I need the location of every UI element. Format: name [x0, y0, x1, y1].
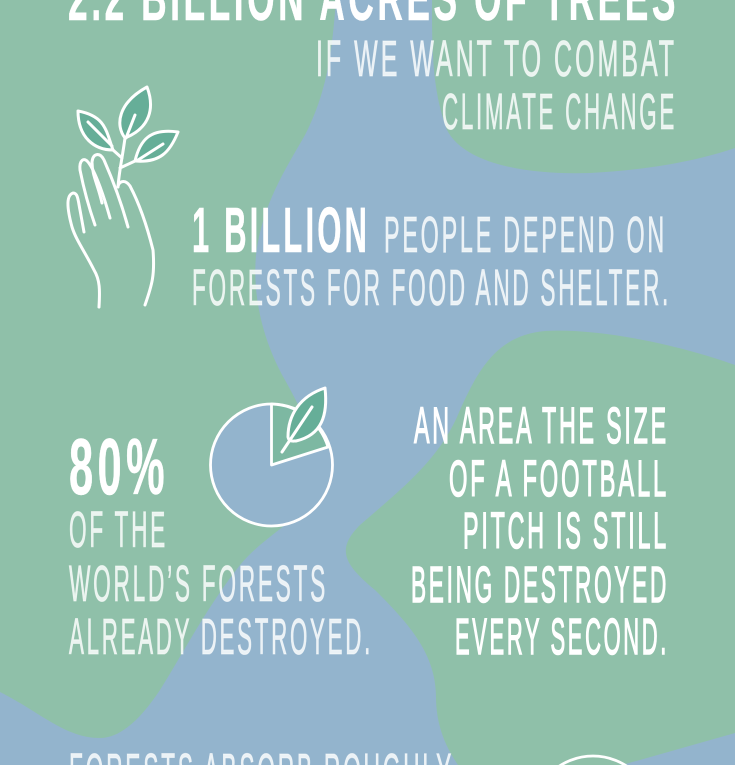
text block: football pitch	[411, 397, 669, 665]
background blob: lower right green	[346, 331, 735, 765]
background blob: left green	[0, 0, 336, 738]
stat: 1 billion people	[192, 194, 671, 316]
icon: circle at bottom	[532, 756, 654, 765]
icon: pie chart with leaf	[210, 388, 332, 526]
stat: 80 percent: WORLD’S FORESTS	[69, 555, 328, 612]
icon: hand holding seedling	[68, 87, 178, 307]
subtitle	[316, 30, 677, 140]
stat: 1 billion people: 1 BILLION	[192, 194, 370, 266]
background blob: top right green	[432, 0, 735, 173]
stat: 80 percent: 80%	[69, 422, 169, 511]
stat: 80 percent: OF THE	[69, 501, 168, 558]
stat: 80 percent	[69, 422, 373, 665]
